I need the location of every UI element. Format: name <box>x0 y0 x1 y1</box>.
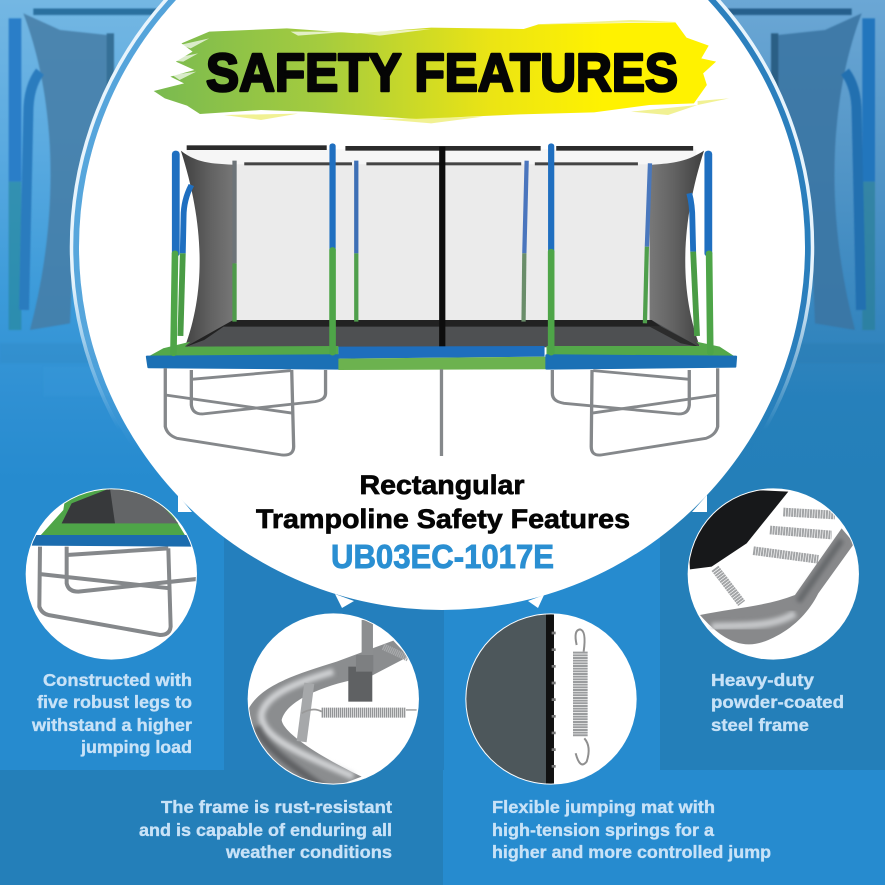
background gradient left <box>0 0 443 480</box>
background gradient right <box>443 0 885 480</box>
caption: jumping mat: high-tension springs for a <box>492 820 714 840</box>
trampoline front poles <box>173 146 710 353</box>
caption: steel frame: steel frame <box>711 715 809 735</box>
trampoline door zipper <box>439 147 445 347</box>
caption: rust-resistant frame: and is capable of enduring all <box>139 820 392 840</box>
faded trampoline background left <box>0 8 167 397</box>
trampoline frame pad <box>147 342 736 370</box>
caption: legs: five robust legs to <box>37 692 192 712</box>
caption: rust-resistant frame: The frame is rust-resistant <box>161 797 392 817</box>
faded trampoline background right <box>718 8 885 363</box>
caption: rust-resistant frame: weather conditions <box>225 842 392 862</box>
caption: steel frame <box>711 670 844 735</box>
caption: jumping mat <box>492 797 771 862</box>
detail circle: frame joint <box>247 613 419 800</box>
caption: legs: jumping load <box>80 737 192 757</box>
caption: steel frame: powder-coated <box>711 692 844 712</box>
title brush stroke <box>154 20 729 123</box>
caption: legs <box>31 670 192 757</box>
trampoline jumping mat <box>185 320 700 347</box>
trampoline top bars <box>187 145 693 165</box>
main trampoline illustration <box>147 145 736 456</box>
background panels <box>0 480 885 885</box>
trampoline back poles <box>235 161 650 323</box>
caption: jumping mat: Flexible jumping mat with <box>492 797 715 817</box>
subtitle: UB03EC-1017E <box>331 538 554 575</box>
subtitle: Rectangular <box>360 470 525 500</box>
caption: legs: Constructed with <box>43 670 192 690</box>
caption: rust-resistant frame <box>139 797 392 862</box>
detail circle: steel frame <box>685 487 859 660</box>
trampoline side nets <box>181 151 704 347</box>
detail circle: jumping mat and spring <box>463 612 637 788</box>
subtitle: Trampoline Safety Features <box>256 504 630 534</box>
caption: legs: withstand a higher <box>31 715 192 735</box>
caption: steel frame: Heavy-duty <box>711 670 814 690</box>
detail circle: legs <box>26 488 197 660</box>
trampoline net back panel <box>187 149 696 322</box>
trampoline curved side poles <box>180 185 697 336</box>
title: SAFETY FEATURES <box>206 43 678 103</box>
trampoline legs <box>165 368 718 456</box>
main white disc with pointers <box>79 0 805 610</box>
caption: jumping mat: higher and more controlled jump <box>492 842 771 862</box>
subtitle <box>256 470 630 575</box>
decorative ring around main disc <box>70 0 814 428</box>
